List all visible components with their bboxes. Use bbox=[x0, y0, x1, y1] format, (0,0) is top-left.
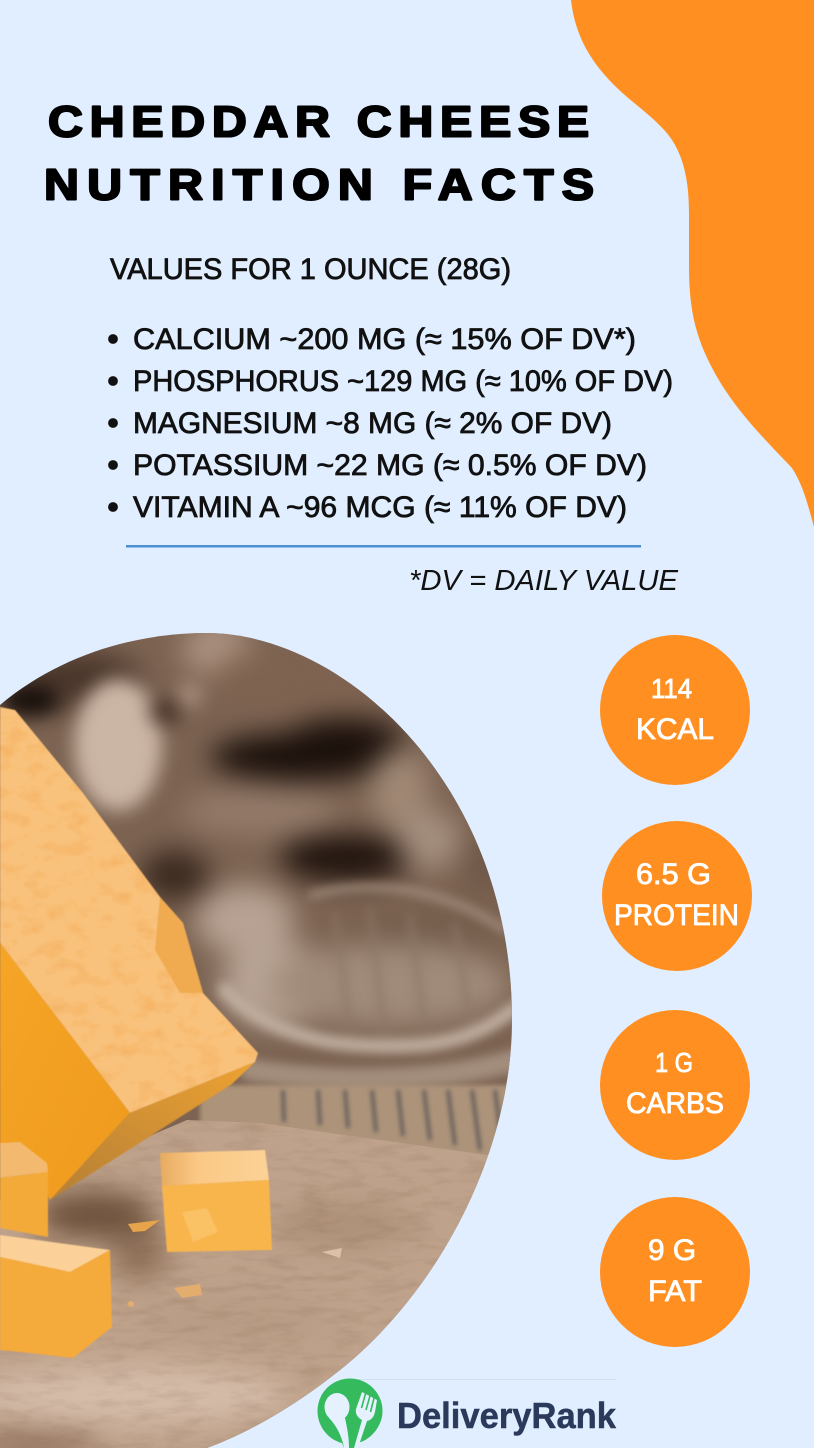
wedge top face bbox=[0, 707, 258, 1113]
fat badge: 9 G bbox=[648, 1234, 696, 1267]
wordmark: DeliveryRank bbox=[397, 1395, 617, 1436]
wedge side facet bbox=[155, 897, 203, 993]
nutrient list bbox=[108, 323, 673, 524]
fat badge bbox=[600, 1197, 750, 1347]
cheese photo bbox=[0, 620, 520, 1448]
carbs badge: 1 G bbox=[655, 1047, 693, 1078]
cheese cube: centre bbox=[160, 1150, 272, 1252]
protein badge: 6.5 G bbox=[636, 858, 711, 891]
fat badge: FAT bbox=[648, 1275, 702, 1308]
wedge underside bbox=[50, 1062, 255, 1200]
calories badge: 114 bbox=[651, 673, 692, 704]
icon: spoon and fork bbox=[318, 1378, 382, 1448]
title: NUTRITION FACTS bbox=[44, 160, 594, 209]
nutrient list: POTASSIUM ~22 MG (≈ 0.5% OF DV) bbox=[133, 449, 647, 482]
pale blob behind wedge bbox=[0, 679, 203, 811]
serving size subheading: VALUES FOR 1 OUNCE (28G) bbox=[110, 253, 511, 286]
DeliveryRank logo bbox=[318, 1378, 617, 1448]
calories badge bbox=[600, 635, 750, 785]
blurred burlap backdrop bbox=[20, 620, 510, 1027]
nutrient list: MAGNESIUM ~8 MG (≈ 2% OF DV) bbox=[133, 407, 612, 440]
protein badge bbox=[602, 821, 752, 971]
orange corner blob bbox=[571, 0, 814, 527]
burlap folds bbox=[225, 887, 515, 1079]
wooden slats bbox=[200, 1085, 520, 1160]
nutrient list: PHOSPHORUS ~129 MG (≈ 10% OF DV) bbox=[133, 365, 673, 398]
cutting board bbox=[0, 1110, 520, 1448]
carbs badge: CARBS bbox=[626, 1087, 724, 1120]
daily value footnote: *DV = DAILY VALUE bbox=[409, 565, 679, 597]
cheese cube: bottom bbox=[0, 1235, 112, 1358]
calories badge: KCAL bbox=[636, 713, 714, 746]
nutrient list: VITAMIN A ~96 MCG (≈ 11% OF DV) bbox=[133, 491, 627, 524]
title bbox=[44, 97, 594, 209]
protein badge: PROTEIN bbox=[614, 899, 739, 932]
cheese wedge bbox=[0, 700, 265, 1200]
nutrient list: CALCIUM ~200 MG (≈ 15% OF DV*) bbox=[133, 323, 636, 356]
wedge front face bbox=[0, 943, 130, 1200]
title: CHEDDAR CHEESE bbox=[48, 97, 589, 146]
crumbs bbox=[128, 1220, 342, 1307]
cheese cube: left bbox=[0, 1142, 48, 1237]
carbs badge bbox=[600, 1010, 750, 1160]
